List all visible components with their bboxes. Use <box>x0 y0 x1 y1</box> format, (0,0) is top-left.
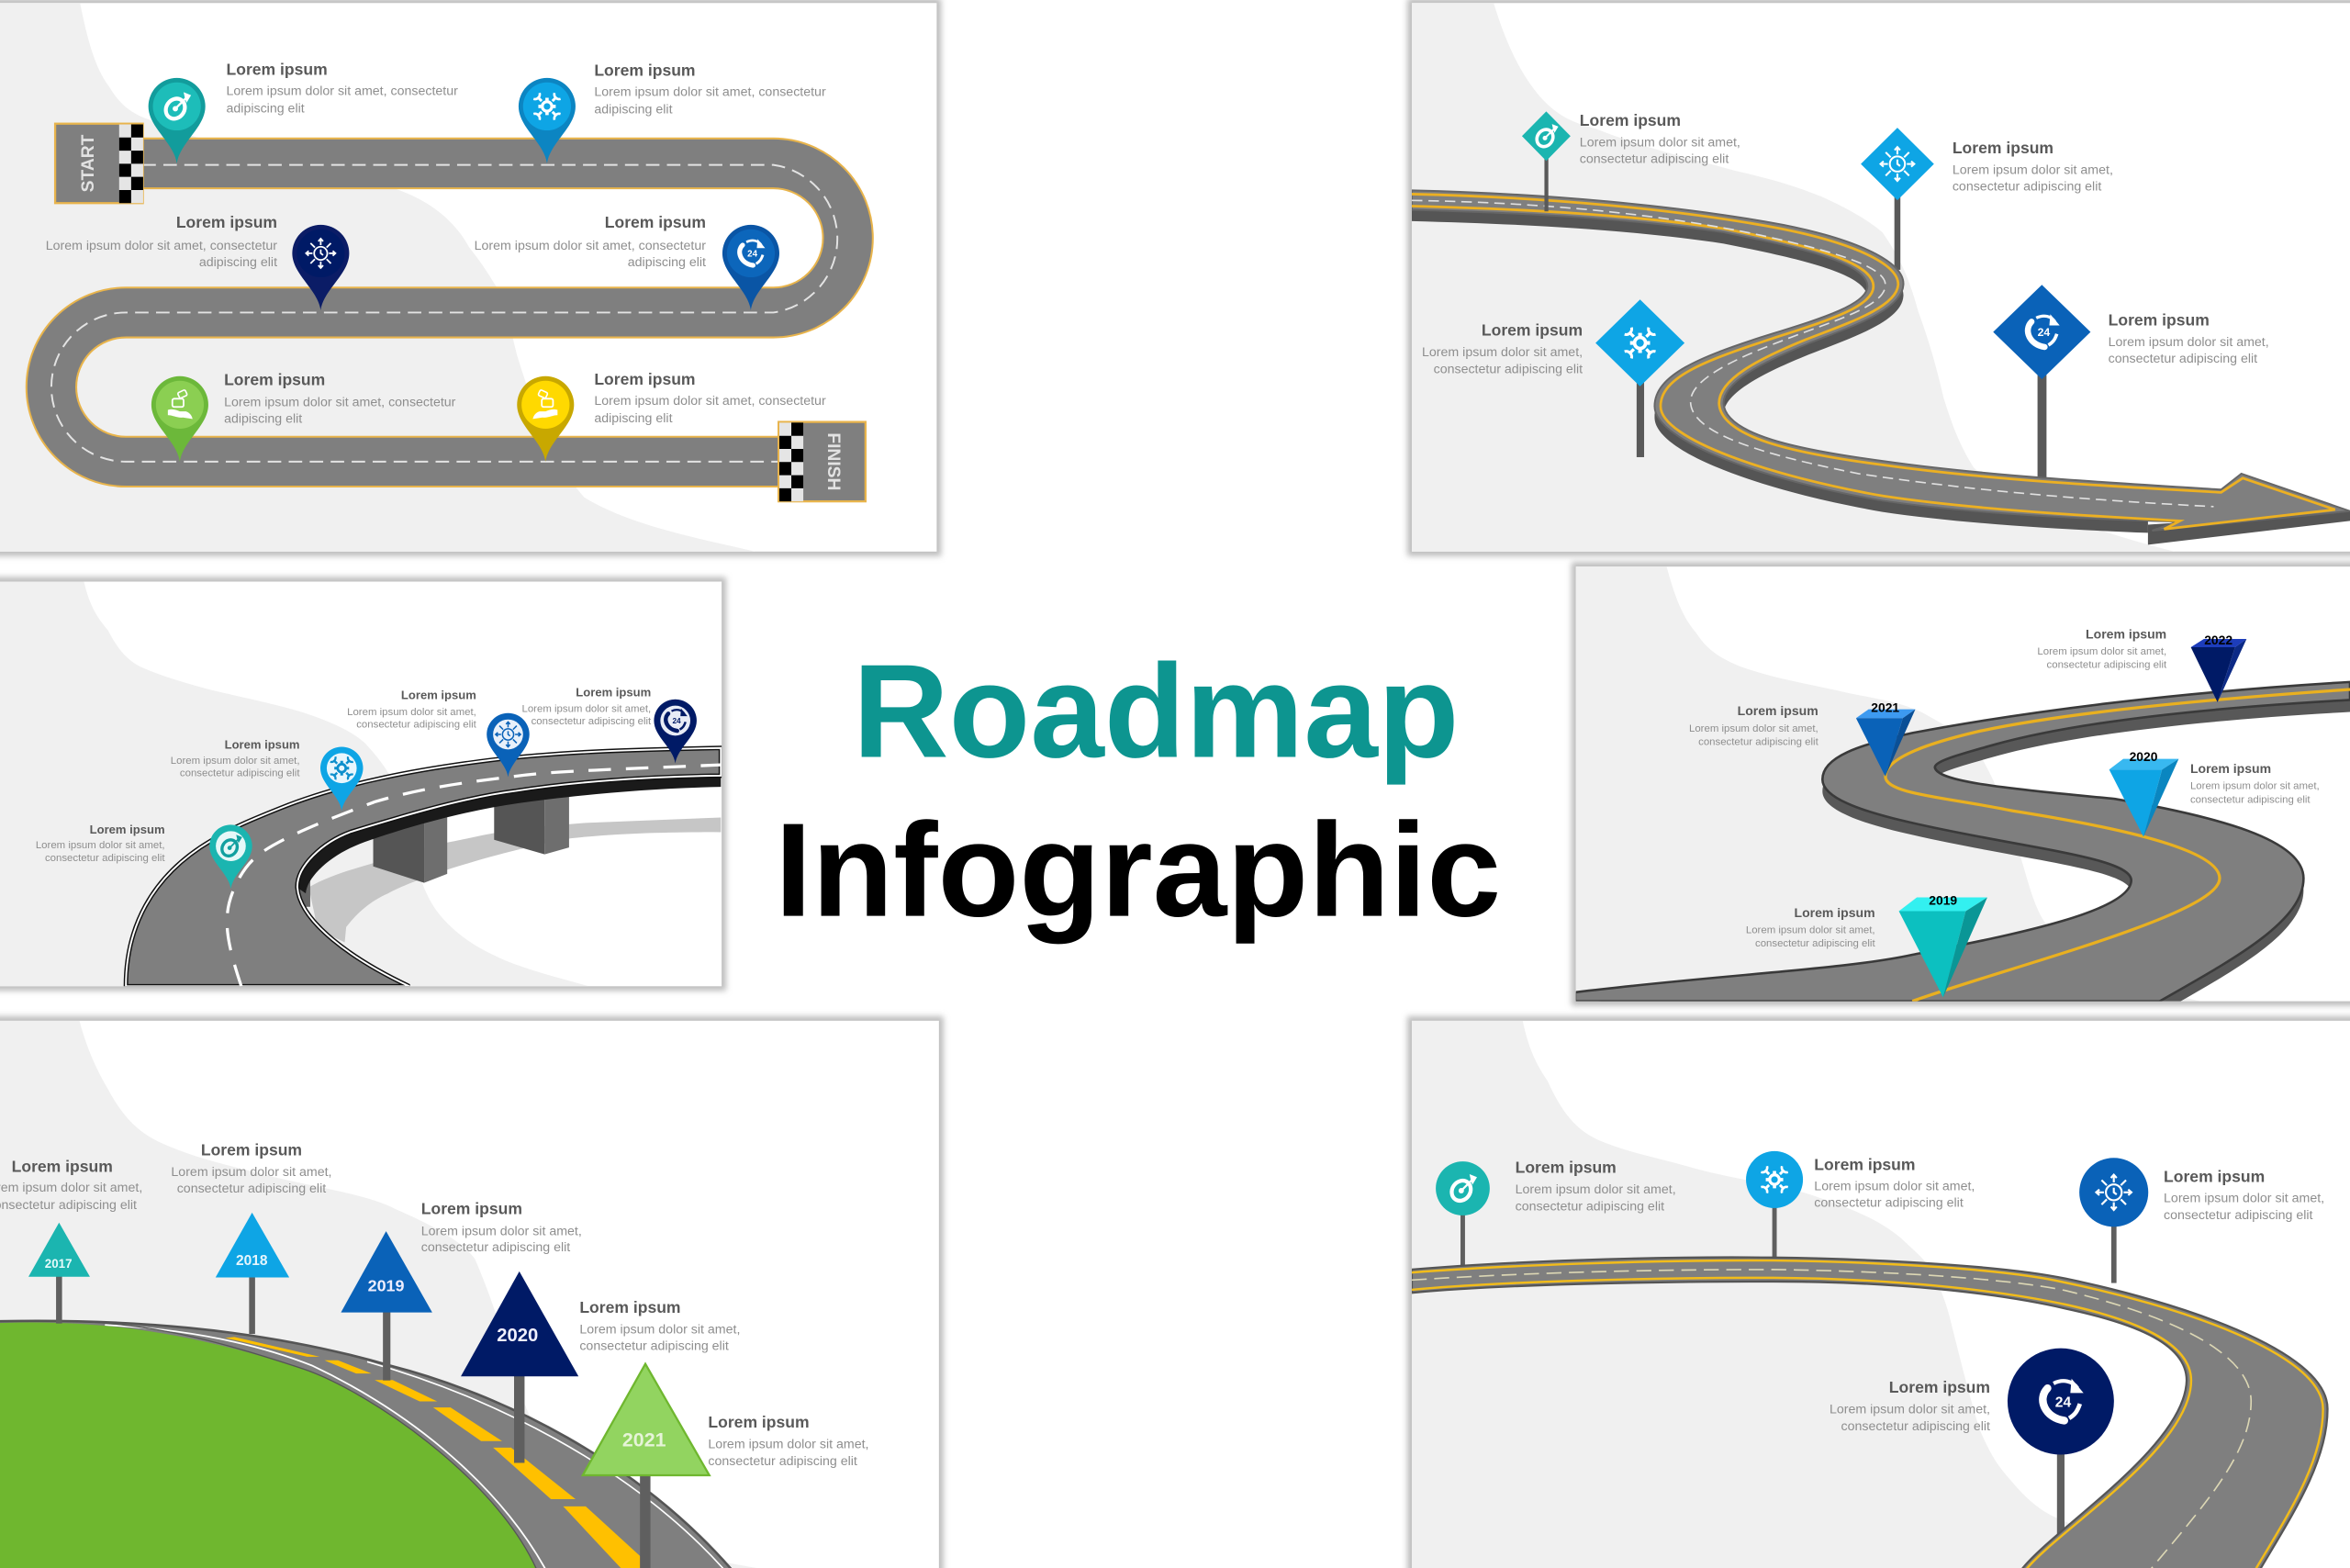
panel: winding road with start and finish <box>0 0 941 556</box>
pin: clock arrows <box>292 225 349 310</box>
text block: pin 4: consectetur adipiscing elit <box>532 716 652 727</box>
text block: stop 2: Lorem ipsum dolor sit amet, consectetur <box>594 85 826 100</box>
text block: sign 4: consectetur adipiscing elit <box>2109 352 2257 366</box>
sign: clock diamond <box>1861 128 1934 200</box>
panel: elevated highway with pins <box>0 577 726 991</box>
text block: sign 2 <box>1814 1155 1975 1211</box>
text block: sign 3: Lorem ipsum dolor sit amet, <box>2164 1192 2324 1206</box>
marker: 2021 <box>1856 700 1916 777</box>
text block: pin 4 <box>521 686 652 727</box>
text block: pin 3: consectetur adipiscing elit <box>356 720 477 731</box>
bridge pier 1 <box>374 810 447 883</box>
text block: pin 1: consectetur adipiscing elit <box>45 853 165 864</box>
text block: pin 4: Lorem ipsum dolor sit amet, <box>521 704 651 715</box>
marker: 2020: 2020 <box>2130 749 2158 764</box>
text block: stop 6: Lorem ipsum dolor sit amet, consectetur <box>594 394 826 409</box>
text block: sign 2: Lorem ipsum <box>1814 1155 1916 1173</box>
text block: stop 4: Lorem ipsum <box>605 213 706 231</box>
panel: S-curve road with diamond signs <box>1407 0 2350 556</box>
bridge pier 2 <box>494 787 569 855</box>
pin: 24 hour phone: 24 <box>747 250 758 260</box>
pin: 24 phone <box>654 700 697 764</box>
sign: clock circle <box>2079 1158 2148 1226</box>
text block: 2018: Lorem ipsum dolor sit amet, <box>171 1165 331 1180</box>
marker: 2022 <box>2191 633 2246 702</box>
text block: sign 4: Lorem ipsum dolor sit amet, <box>2109 335 2269 350</box>
text block: sign 1: Lorem ipsum dolor sit amet, <box>1580 135 1740 150</box>
text block: stop 4 <box>475 213 706 270</box>
text block: pin 2: Lorem ipsum <box>225 738 300 752</box>
pole: sign 4 <box>2038 375 2046 479</box>
text block: sign 4: Lorem ipsum <box>1889 1378 1990 1396</box>
sign: target diamond <box>1522 111 1571 161</box>
text block: sign 4: Lorem ipsum <box>2109 310 2210 329</box>
text block: stop 5: Lorem ipsum dolor sit amet, consectetur <box>224 395 456 409</box>
ground shadow <box>308 817 721 942</box>
sign: 2020: 2020 <box>497 1326 538 1346</box>
text block: stop 2: Lorem ipsum <box>594 61 696 79</box>
title: Roadmap <box>853 637 1459 786</box>
road: serpentine track <box>51 163 848 462</box>
text block: 2020 <box>579 1298 740 1354</box>
text block: stop 1: Lorem ipsum <box>227 61 328 79</box>
marker: 2019: 2019 <box>1929 892 1957 907</box>
text block: 2018 <box>171 1140 331 1196</box>
text block: sign 4 <box>2109 310 2269 366</box>
text block: 2021: consectetur adipiscing elit <box>1698 736 1819 747</box>
text block: stop 5 <box>224 371 456 426</box>
pin: target <box>149 78 206 163</box>
road: downhill curve <box>0 1321 732 1568</box>
text block: stop 3: adipiscing elit <box>199 255 277 270</box>
text block: stop 5: Lorem ipsum <box>224 371 325 389</box>
text block: sign 2: Lorem ipsum <box>1953 139 2053 157</box>
pole: sign 1 <box>1460 1211 1465 1272</box>
pole: 2018 <box>249 1274 255 1334</box>
text block: sign 3: Lorem ipsum <box>1482 321 1583 340</box>
text block: sign 2 <box>1953 139 2113 195</box>
text block: sign 2: consectetur adipiscing elit <box>1814 1196 1964 1211</box>
text block: pin 2: Lorem ipsum dolor sit amet, <box>171 756 300 767</box>
lane dashes <box>225 1337 642 1568</box>
text block: sign 2: consectetur adipiscing elit <box>1953 180 2101 195</box>
text block: sign 3: consectetur adipiscing elit <box>2164 1208 2313 1223</box>
text block: pin 3 <box>347 689 477 731</box>
text block: pin 1: Lorem ipsum dolor sit amet, <box>36 840 165 851</box>
sign: 2019 <box>341 1231 432 1313</box>
text block: 2020: Lorem ipsum <box>2190 761 2271 776</box>
sign: 24 phone diamond: 24 <box>2038 326 2050 339</box>
text block: stop 3 <box>46 213 277 270</box>
text block: 2019: consectetur adipiscing elit <box>1755 938 1875 949</box>
text block: 2019 <box>421 1199 582 1255</box>
sign: tools diamond <box>1595 299 1684 386</box>
text block: sign 1: Lorem ipsum <box>1516 1158 1617 1176</box>
bridge pier 3 <box>300 877 310 907</box>
panel: 3D road with pyramid markers <box>1572 562 2350 1014</box>
pole: sign 2 <box>1895 195 1900 270</box>
text block: sign 2: Lorem ipsum dolor sit amet, <box>1814 1179 1975 1193</box>
pin: clock <box>487 713 530 778</box>
pole: sign 4 <box>2057 1447 2065 1540</box>
text block: 2020: consectetur adipiscing elit <box>579 1339 729 1354</box>
start flag: START <box>79 134 98 192</box>
sign: tools circle <box>1746 1151 1803 1208</box>
text block: pin 2: consectetur adipiscing elit <box>180 768 300 779</box>
text block: stop 1: Lorem ipsum dolor sit amet, consectetur <box>227 84 458 99</box>
pole: sign 3 <box>1637 382 1644 457</box>
text block: sign 1: Lorem ipsum <box>1580 111 1681 129</box>
text block: 2020: consectetur adipiscing elit <box>2190 794 2311 805</box>
marker: 2020 <box>2109 749 2178 837</box>
text block: stop 3: Lorem ipsum <box>176 213 277 231</box>
marker: 2021: 2021 <box>1871 700 1899 715</box>
text block: sign 4: Lorem ipsum dolor sit amet, <box>1830 1403 1990 1417</box>
text block: pin 1 <box>36 823 165 864</box>
road: S-curve with side wall <box>1575 682 2350 1014</box>
text block: sign 1 <box>1580 111 1740 167</box>
sign: 2018 <box>216 1213 289 1278</box>
text block: pin 4: Lorem ipsum <box>576 686 651 700</box>
sign: 2017 <box>28 1223 90 1277</box>
pole: sign 3 <box>2111 1222 2117 1283</box>
text block: 2021: Lorem ipsum <box>1738 703 1818 718</box>
text block: 2020: Lorem ipsum dolor sit amet, <box>2190 781 2320 792</box>
text block: 2019: Lorem ipsum dolor sit amet, <box>421 1224 582 1238</box>
text block: 2021: consectetur adipiscing elit <box>708 1454 857 1469</box>
text block: 2018: Lorem ipsum <box>201 1140 302 1159</box>
text block: 2022 <box>2037 627 2167 671</box>
text block: sign 1: consectetur adipiscing elit <box>1580 152 1729 167</box>
text block: pin 2 <box>171 738 300 779</box>
sign: 24 phone diamond <box>1993 285 2090 379</box>
text block: sign 4: consectetur adipiscing elit <box>1841 1419 1990 1434</box>
text block: 2019: Lorem ipsum <box>421 1199 522 1217</box>
pin: target <box>209 824 252 889</box>
pole: 2019 <box>383 1310 390 1381</box>
text block: sign 3 <box>2164 1168 2324 1223</box>
text block: 2022: Lorem ipsum dolor sit amet, <box>2037 646 2166 657</box>
sign: 2017: 2017 <box>45 1257 73 1271</box>
text block: 2021 <box>1689 703 1819 747</box>
text block: 2018: consectetur adipiscing elit <box>177 1182 326 1196</box>
text block: 2021 <box>708 1413 868 1469</box>
text block: sign 1 <box>1516 1158 1676 1214</box>
text block: sign 3: Lorem ipsum <box>2164 1168 2265 1186</box>
text block: stop 2 <box>594 61 826 117</box>
text block: 2022: consectetur adipiscing elit <box>2047 660 2167 671</box>
text block: 2020: Lorem ipsum <box>579 1298 681 1316</box>
finish flag <box>778 422 866 501</box>
text block: 2022: Lorem ipsum <box>2086 627 2166 642</box>
text block: sign 2: Lorem ipsum dolor sit amet, <box>1953 162 2113 177</box>
sign: 2021 <box>583 1364 710 1475</box>
title: Infographic <box>775 795 1501 945</box>
text block: sign 1: Lorem ipsum dolor sit amet, <box>1516 1182 1676 1197</box>
pole: 2020 <box>514 1373 524 1462</box>
text block: pin 3: Lorem ipsum <box>401 689 476 702</box>
text block: stop 6 <box>594 370 826 426</box>
finish flag: FINISH <box>823 432 843 490</box>
pin: 24 phone: 24 <box>672 716 681 725</box>
road: 3D S-curve with arrow head <box>1412 190 2350 544</box>
text block: stop 5: adipiscing elit <box>224 411 302 426</box>
text block: 2021: Lorem ipsum dolor sit amet, <box>708 1437 868 1451</box>
pin: green hand <box>151 376 208 462</box>
text block: stop 1 <box>227 61 458 116</box>
text block: stop 6: Lorem ipsum <box>594 370 696 388</box>
pole: 2017 <box>56 1274 62 1324</box>
sign: 2019: 2019 <box>368 1277 405 1295</box>
road: sweeping bend <box>1412 1258 2328 1568</box>
pin: tools <box>519 78 576 163</box>
sign: target circle <box>1436 1161 1490 1215</box>
sign: 2021: 2021 <box>622 1429 666 1451</box>
text block: 2017: Lorem ipsum <box>12 1157 113 1175</box>
text block: stop 2: adipiscing elit <box>594 102 673 117</box>
text block: stop 3: Lorem ipsum dolor sit amet, consectetur <box>46 239 277 253</box>
text block: sign 3: consectetur adipiscing elit <box>1434 363 1583 377</box>
marker: 2022: 2022 <box>2204 633 2232 647</box>
text block: stop 4: adipiscing elit <box>628 255 706 270</box>
text block: 2019: consectetur adipiscing elit <box>421 1240 570 1255</box>
text block: sign 3: Lorem ipsum dolor sit amet, <box>1422 345 1583 360</box>
road underside <box>297 776 721 893</box>
text block: 2020 <box>2190 761 2320 805</box>
pole: sign 2 <box>1773 1204 1777 1259</box>
sign: 2020 <box>461 1271 578 1376</box>
text block: stop 4: Lorem ipsum dolor sit amet, consectetur <box>475 239 706 253</box>
start flag <box>55 124 143 203</box>
road: curved overpass <box>126 748 721 986</box>
text block: sign 4 <box>1830 1378 1990 1434</box>
text block: stop 6: adipiscing elit <box>594 411 673 426</box>
text block: stop 1: adipiscing elit <box>227 101 305 116</box>
text block: 2019: Lorem ipsum dolor sit amet, <box>1746 925 1875 936</box>
pole: sign 1 <box>1544 157 1549 211</box>
text block: 2019: Lorem ipsum <box>1795 905 1875 920</box>
text block: 2021: Lorem ipsum dolor sit amet, <box>1689 723 1818 734</box>
panel: sweeping road with round signs <box>1407 1016 2350 1568</box>
sign: 24 phone circle <box>2008 1349 2114 1455</box>
sign: 2018: 2018 <box>236 1253 268 1269</box>
sign: 24 phone circle: 24 <box>2055 1394 2072 1410</box>
pin: yellow hand <box>517 376 574 462</box>
text block: pin 3: Lorem ipsum dolor sit amet, <box>347 707 476 718</box>
text block: sign 3 <box>1422 321 1583 377</box>
text block: sign 1: consectetur adipiscing elit <box>1516 1199 1664 1214</box>
text block: pin 1: Lorem ipsum <box>90 823 165 836</box>
green hill <box>0 1322 536 1568</box>
text block: 2017 <box>0 1157 142 1213</box>
title <box>775 637 1501 945</box>
pin: tools <box>320 746 364 811</box>
pole: 2021 <box>640 1473 651 1568</box>
panel: hill road with triangle signs <box>0 1016 944 1568</box>
text block: 2020: Lorem ipsum dolor sit amet, <box>579 1323 740 1338</box>
text block: 2021: Lorem ipsum <box>708 1413 810 1431</box>
text block: 2019 <box>1746 905 1875 949</box>
pin: 24 hour phone <box>722 225 779 310</box>
marker: 2019 <box>1899 892 1987 997</box>
